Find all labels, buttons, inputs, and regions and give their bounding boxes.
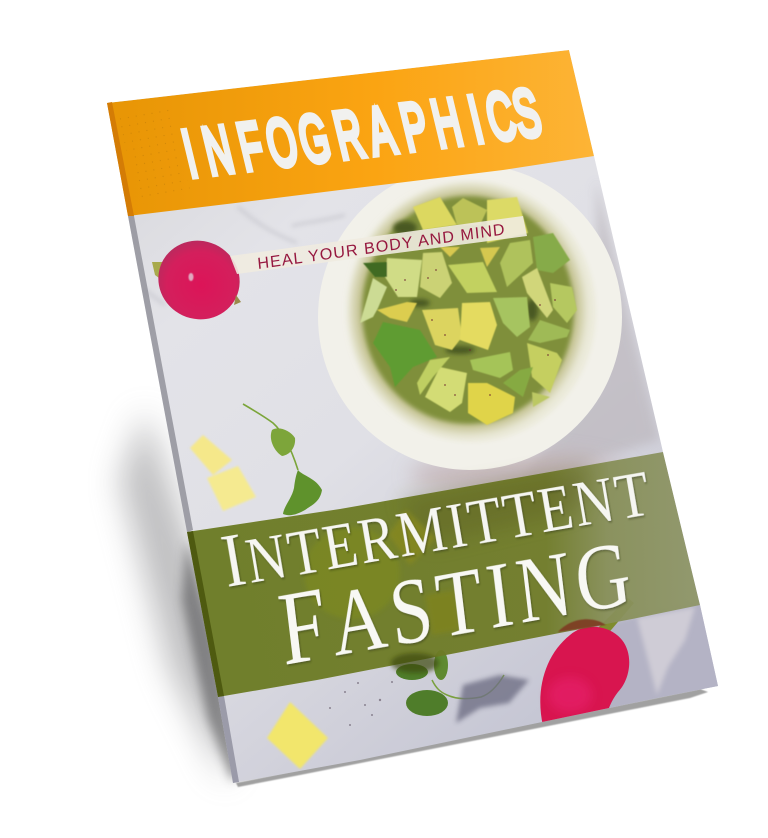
halftone dots xyxy=(120,110,190,197)
cover base marble xyxy=(107,50,718,783)
ghost yellow cube xyxy=(425,590,460,635)
title: Fasting: FASTING xyxy=(273,509,641,688)
pink shadow under bowl xyxy=(410,453,630,497)
spine band xyxy=(187,531,224,697)
radish top xyxy=(152,240,241,320)
ghost pineapple xyxy=(390,512,434,563)
pineapple cubes xyxy=(190,435,256,511)
orange header band xyxy=(107,50,594,216)
ghost sprig dark xyxy=(391,653,439,673)
spine lower xyxy=(218,696,239,783)
spine marble xyxy=(128,216,193,532)
cloth lower right xyxy=(609,602,718,708)
pepper specks xyxy=(329,681,393,726)
cast shadow xyxy=(120,410,708,787)
cilantro sprig top xyxy=(243,404,322,515)
subtitle text: HEAL YOUR BODY AND MIND xyxy=(257,221,505,273)
radish bottom xyxy=(540,598,634,726)
dark marble smear xyxy=(456,675,529,723)
bowl xyxy=(318,164,622,470)
subtitle ribbon xyxy=(230,216,527,274)
spice specks xyxy=(395,269,556,396)
cilantro sprig bottom xyxy=(396,650,504,716)
food chunks xyxy=(360,197,577,425)
ghost radish xyxy=(558,619,606,632)
ghost shadow in band xyxy=(400,466,590,545)
title: Intermittent: INTERMITTENT xyxy=(216,447,657,604)
title: INFOGRAPHICS: INFOGRAPHICS xyxy=(176,75,548,192)
pineapple cube bottom xyxy=(267,702,328,769)
ghost lime xyxy=(304,527,400,619)
photo on cover xyxy=(107,50,722,769)
book cover xyxy=(107,50,722,783)
marble veins xyxy=(145,207,345,305)
cloth upper right xyxy=(540,195,660,466)
dark pits xyxy=(393,221,538,354)
spine orange strip xyxy=(107,102,134,216)
green title band xyxy=(187,452,700,697)
infographic book cover mockup xyxy=(106,50,718,788)
